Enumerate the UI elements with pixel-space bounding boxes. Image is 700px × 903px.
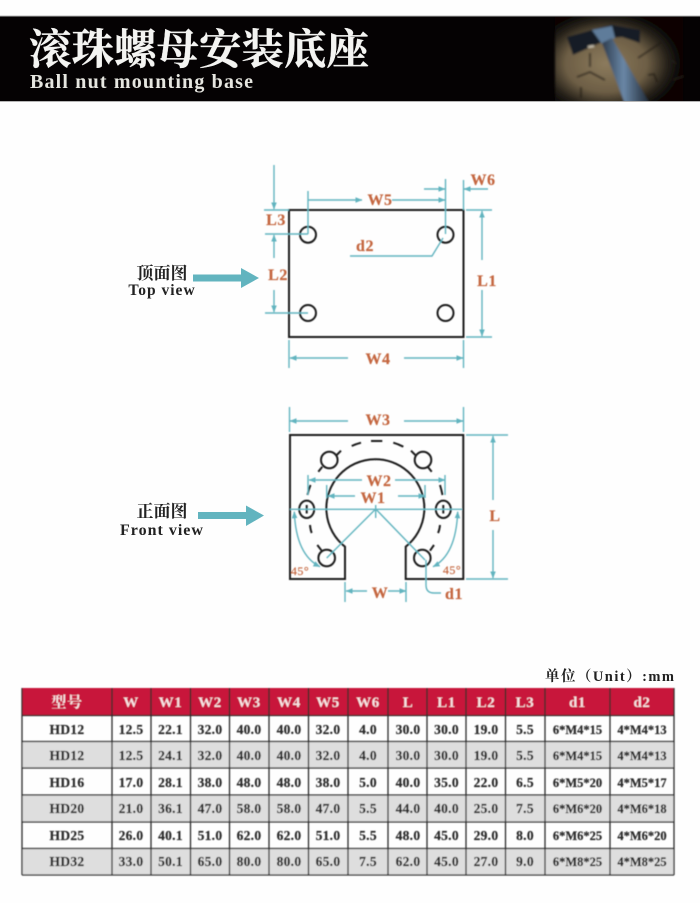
row: HD20: 21.0 xyxy=(119,801,143,816)
subtitle: Ball nut mounting base xyxy=(30,71,253,93)
table header row: W2 xyxy=(198,695,222,711)
row: HD12 second: 24.1 xyxy=(158,748,183,763)
row: HD20: 58.0 xyxy=(277,801,301,816)
table header row: L2 xyxy=(477,695,495,711)
top view dimension labels: L2 xyxy=(268,267,288,284)
row: HD16: 4*M5*17 xyxy=(617,776,667,790)
front view label: 正面图 xyxy=(136,502,188,521)
top view drawing xyxy=(264,165,497,368)
title: 滚珠螺母安装底座 xyxy=(29,27,370,74)
row: HD12 first: 32.0 xyxy=(198,722,222,737)
top view dimension labels: W4 xyxy=(366,351,390,368)
row: HD20: HD20 xyxy=(50,801,84,816)
row: HD16: 40.0 xyxy=(396,775,420,790)
front view dimension labels: L xyxy=(489,508,501,525)
row: HD32: HD32 xyxy=(50,854,84,869)
row: HD12 second: 30.0 xyxy=(434,748,459,763)
row: HD32: 62.0 xyxy=(396,854,420,869)
row: HD32: 4*M8*25 xyxy=(617,855,667,869)
front view dimension labels: 45° xyxy=(443,563,461,577)
row: HD16: 17.0 xyxy=(119,775,143,790)
top view label: Top view xyxy=(128,282,196,299)
front view label: Front view xyxy=(120,522,204,539)
top view dimension labels: W5 xyxy=(368,192,392,209)
row: HD16: 6*M5*20 xyxy=(553,776,602,790)
top view dimension labels: W6 xyxy=(470,172,496,189)
row: HD25: 62.0 xyxy=(277,828,301,843)
bolt circle and holes xyxy=(299,441,451,566)
row: HD12 first: 32.0 xyxy=(316,722,340,737)
arrow: top view xyxy=(193,268,259,288)
row: HD32: 50.1 xyxy=(158,854,183,869)
table header row: L1 xyxy=(437,695,456,711)
top view dimension labels: L3 xyxy=(266,212,286,229)
row: HD12 first: 40.0 xyxy=(277,722,301,737)
row: HD32: 45.0 xyxy=(434,854,459,869)
row: HD32: 7.5 xyxy=(359,854,377,869)
row: HD16: 38.0 xyxy=(316,775,340,790)
front view dimension labels: W xyxy=(372,585,388,602)
top view dimension labels: L1 xyxy=(477,273,497,290)
row: HD25: 8.0 xyxy=(516,828,534,843)
row: HD16: 28.1 xyxy=(158,775,183,790)
front view label xyxy=(120,502,204,539)
row: HD32: 80.0 xyxy=(237,854,261,869)
row: HD12 second: 4.0 xyxy=(359,748,377,763)
front view dimension labels: W2 xyxy=(366,473,392,490)
row: HD25 xyxy=(50,828,667,843)
table row stripes xyxy=(22,741,674,875)
front view dimension labels xyxy=(291,412,501,603)
table header row: W3 xyxy=(237,695,261,711)
row: HD12 first xyxy=(50,722,667,737)
row: HD12 first: 22.1 xyxy=(158,722,183,737)
row: HD25: 26.0 xyxy=(119,828,143,843)
row: HD12 second: 4*M4*13 xyxy=(617,749,667,763)
top view dimension lines xyxy=(264,165,492,368)
row: HD16: 6.5 xyxy=(516,775,534,790)
table header row: 型号 xyxy=(51,693,83,711)
table header row: d1 xyxy=(569,695,586,711)
row: HD25: 51.0 xyxy=(198,828,222,843)
row: HD12 first: 40.0 xyxy=(237,722,261,737)
row: HD20 xyxy=(50,801,667,816)
row: HD32: 33.0 xyxy=(119,854,143,869)
row: HD12 second: 32.0 xyxy=(316,748,340,763)
row: HD16: 38.0 xyxy=(198,775,222,790)
row: HD25: 45.0 xyxy=(434,828,459,843)
row: HD12 first: 30.0 xyxy=(434,722,459,737)
row: HD16: 5.0 xyxy=(359,775,377,790)
row: HD25: HD25 xyxy=(50,828,84,843)
table header row: W6 xyxy=(356,695,380,711)
row: HD20: 5.5 xyxy=(359,801,377,816)
top view dimension labels xyxy=(266,172,497,368)
row: HD12 second: 5.5 xyxy=(516,748,534,763)
row: HD16: 48.0 xyxy=(237,775,261,790)
table header row: W4 xyxy=(277,695,301,711)
row: HD16: 35.0 xyxy=(434,775,459,790)
top view plate with holes xyxy=(289,210,464,337)
row: HD25: 6*M6*25 xyxy=(553,829,602,843)
top view dimension labels: d2 xyxy=(356,238,374,255)
row: HD12 first: 6*M4*15 xyxy=(553,723,602,737)
table header row: L3 xyxy=(516,695,534,711)
row: HD12 second: 19.0 xyxy=(474,748,498,763)
row: HD20: 4*M6*18 xyxy=(617,802,667,816)
row: HD25: 40.1 xyxy=(158,828,183,843)
row: HD12 second: 32.0 xyxy=(198,748,222,763)
row: HD20: 47.0 xyxy=(198,801,222,816)
row: HD32: 80.0 xyxy=(277,854,301,869)
row: HD12 second: 40.0 xyxy=(277,748,301,763)
front view dimension labels: W3 xyxy=(366,412,390,429)
table header row: W5 xyxy=(316,695,340,711)
row: HD25: 62.0 xyxy=(237,828,261,843)
row: HD20: 58.0 xyxy=(237,801,261,816)
row: HD16: 22.0 xyxy=(474,775,498,790)
row: HD12 first: 5.5 xyxy=(516,722,534,737)
row: HD12 second: 12.5 xyxy=(119,748,143,763)
row: HD16: HD16 xyxy=(50,775,84,790)
row: HD12 first: HD12 xyxy=(50,722,84,737)
row: HD20: 40.0 xyxy=(434,801,459,816)
row: HD12 second xyxy=(50,748,667,763)
row: HD20: 44.0 xyxy=(396,801,420,816)
row: HD12 first: 19.0 xyxy=(474,722,498,737)
row: HD20: 6*M6*20 xyxy=(553,802,602,816)
row: HD12 first: 4.0 xyxy=(359,722,377,737)
top view label xyxy=(128,264,196,299)
row: HD32: 9.0 xyxy=(516,854,534,869)
front view dimension labels: d1 xyxy=(445,586,463,603)
table header row: d2 xyxy=(633,695,651,711)
row: HD32: 65.0 xyxy=(198,854,222,869)
front view dimension labels: 45° xyxy=(291,564,309,578)
row: HD25: 51.0 xyxy=(316,828,340,843)
arrow: front view xyxy=(198,506,264,526)
row: HD16 xyxy=(50,775,667,790)
row: HD20: 36.1 xyxy=(158,801,183,816)
table header row: W1 xyxy=(159,695,182,711)
front view dimension labels: W1 xyxy=(360,490,386,507)
row: HD20: 25.0 xyxy=(474,801,498,816)
table grid xyxy=(22,688,674,875)
row: HD20: 7.5 xyxy=(516,801,534,816)
front view body outline xyxy=(290,435,463,579)
row: HD25: 48.0 xyxy=(396,828,420,843)
table header row: L xyxy=(403,695,413,711)
row: HD25: 29.0 xyxy=(474,828,498,843)
row: HD12 second: 30.0 xyxy=(396,748,420,763)
table header row xyxy=(22,688,674,716)
row: HD12 first: 30.0 xyxy=(396,722,420,737)
row: HD12 second: HD12 xyxy=(50,748,84,763)
unit note: 单位（Unit）:mm xyxy=(545,667,674,685)
front view drawing xyxy=(290,407,508,603)
header banner xyxy=(0,14,700,104)
row: HD25: 5.5 xyxy=(359,828,377,843)
row: HD20: 47.0 xyxy=(316,801,340,816)
row: HD12 second: 6*M4*15 xyxy=(553,749,602,763)
row: HD32 xyxy=(50,854,667,869)
row: HD16: 48.0 xyxy=(277,775,301,790)
row: HD32: 27.0 xyxy=(474,854,498,869)
row: HD12 first: 4*M4*13 xyxy=(617,723,667,737)
row: HD25: 4*M6*20 xyxy=(617,829,667,843)
row: HD12 first: 12.5 xyxy=(119,722,143,737)
icon: hammer photo xyxy=(555,14,684,104)
row: HD12 second: 40.0 xyxy=(237,748,261,763)
specification table xyxy=(22,688,674,875)
row: HD32: 65.0 xyxy=(316,854,340,869)
front view dimension lines xyxy=(290,407,508,602)
top view label: 顶面图 xyxy=(136,264,188,283)
row: HD32: 6*M8*25 xyxy=(553,855,602,869)
table header row: W xyxy=(123,695,139,711)
